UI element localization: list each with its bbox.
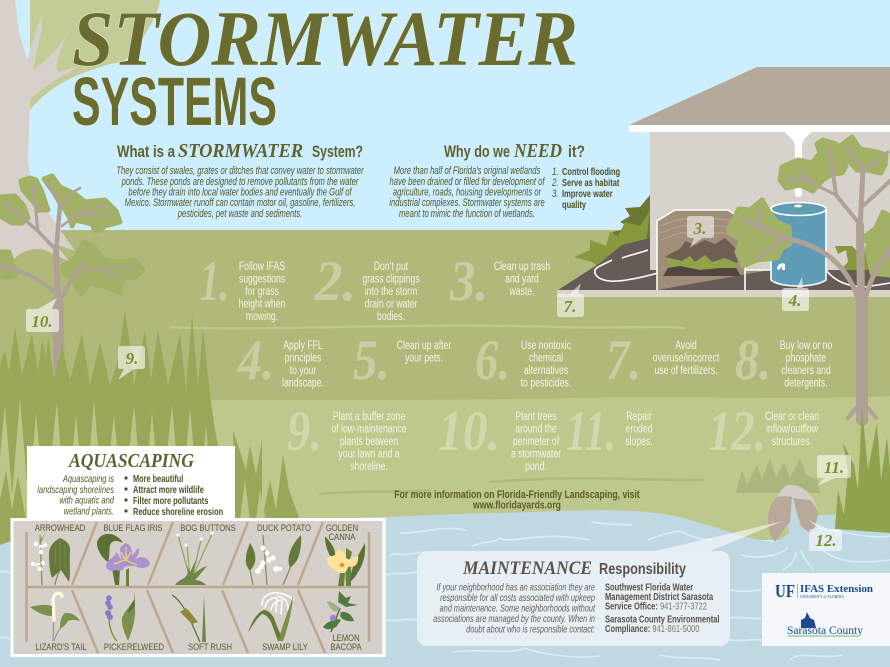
callout 3 — [687, 216, 714, 248]
step 6: chemical — [529, 351, 563, 365]
step 5: your pets. — [405, 351, 443, 365]
plant: soft rush — [172, 595, 232, 652]
lawn upper band — [0, 230, 890, 410]
section: what is a stormwater system — [116, 140, 364, 219]
tree right — [729, 137, 890, 420]
aquascaping panel: wetland plants. — [64, 505, 114, 517]
plant guide panel — [12, 520, 384, 656]
plant: lizard's tail: LIZARD'S TAIL — [35, 641, 87, 652]
step 4: 4. — [237, 329, 274, 392]
step 11: eroded — [626, 422, 653, 436]
step 5 — [353, 329, 452, 392]
step 5: Clean up after — [397, 339, 452, 352]
house — [629, 67, 890, 275]
step 4: principles — [285, 351, 321, 365]
water waves — [0, 522, 890, 660]
callout 4: 4. — [788, 291, 801, 310]
step 8: detergents. — [784, 376, 828, 390]
downspout — [785, 132, 811, 197]
plant: arrowhead: ARROWHEAD — [35, 522, 85, 533]
callout 12 — [808, 520, 842, 551]
step 11: slopes. — [625, 435, 653, 448]
step 6: alternatives — [524, 364, 568, 377]
step 6: 6. — [475, 329, 510, 392]
step 1 — [200, 250, 285, 323]
step 2: grass clippings — [362, 272, 420, 286]
step 10 — [438, 400, 561, 473]
step 11: Repair — [626, 410, 652, 423]
aquascaping panel: landscaping shorelines — [37, 484, 114, 495]
step 1: height when — [239, 297, 285, 311]
step 2 — [314, 250, 420, 323]
callout 10 — [26, 298, 59, 332]
callout 7 — [557, 283, 584, 317]
step 7: use of fertilizers. — [654, 364, 718, 377]
aquascaping panel: with aquatic and — [59, 494, 115, 506]
plant: arrowhead — [31, 522, 85, 585]
rain barrel — [771, 202, 826, 286]
section: why do we need it: More than half of Florida's original wetlands — [394, 165, 541, 176]
step 12: 12. — [708, 400, 766, 463]
callout 11 — [817, 455, 851, 486]
maintenance panel: associations are managed by the county. When in — [433, 613, 595, 624]
maintenance panel: Compliance: 941-861-5000 — [605, 623, 699, 634]
step 3: and yard — [505, 272, 539, 286]
reasons list — [551, 166, 620, 210]
step 7: 7. — [606, 329, 641, 392]
aquascaping panel: Filter more pollutants — [133, 495, 208, 506]
section: what is a stormwater system: System? — [312, 142, 363, 161]
logo: UF IFAS Extension: UNIVERSITY of FLORIDA — [800, 594, 845, 599]
step 12: Clear or clean — [765, 410, 819, 423]
maintenance panel: Service Office: 941-377-3722 — [605, 600, 707, 612]
step 6: to pesticides. — [521, 376, 571, 390]
plant: blue flag iris — [97, 522, 163, 586]
background tree with canopy — [0, 0, 160, 265]
aquascaping panel: More beautiful — [133, 473, 183, 484]
florida-friendly footer note: For more information on Florida-Friendly Landscaping, visit — [394, 489, 640, 501]
reasons list: 2. — [551, 177, 559, 188]
logo: UF IFAS Extension: IFAS Extension — [800, 583, 873, 595]
callout 9: 9. — [126, 349, 138, 368]
maintenance panel: Management District Sarasota — [605, 591, 713, 602]
reasons list: Improve water — [562, 188, 613, 199]
maintenance panel pointer — [655, 521, 783, 551]
logo: UF IFAS Extension: UF — [775, 581, 795, 601]
step 7 — [606, 329, 719, 392]
step 9: shoreline. — [350, 460, 388, 473]
step 9: of low-maintenance — [331, 422, 407, 436]
section: what is a stormwater system: pesticides, pet waste and sediments. — [177, 208, 302, 219]
callout 7: 7. — [564, 297, 576, 316]
step 12 — [708, 400, 819, 463]
section: why do we need it: Why do we — [444, 142, 510, 161]
step 4: landscape. — [282, 376, 324, 390]
step 2: drain or water — [365, 297, 418, 311]
plant: pickerelweed: PICKERELWEED — [104, 641, 164, 652]
plant: golden canna: GOLDEN — [326, 522, 358, 533]
plant: swamp lily — [248, 593, 308, 652]
plant: blue flag iris: BLUE FLAG IRIS — [103, 522, 163, 533]
section: what is a stormwater system: Mexico. Stormwater runoff can contain motor oil, gasoline, fertilizers, — [125, 197, 355, 208]
aquascaping panel: Reduce shoreline erosion — [133, 506, 223, 517]
logos panel — [762, 573, 890, 646]
step 1: for grass — [245, 285, 279, 298]
maintenance panel: If your neighborhood has an association they are — [436, 581, 595, 593]
plant: lemon bacopa: LEMON — [332, 632, 360, 643]
sidewalk — [557, 290, 890, 297]
step 8: cleaners and — [781, 364, 831, 377]
step 6 — [475, 329, 572, 392]
step 3: Clean up trash — [494, 260, 550, 273]
step 7: overuse/incorrect — [653, 351, 719, 365]
logo: Sarasota County: Sarasota County — [787, 623, 863, 637]
plant: lemon bacopa: BACOPA — [330, 641, 362, 652]
plant: golden canna — [325, 522, 365, 586]
aquascaping panel: Attract more wildlife — [133, 484, 204, 495]
step 2: bodies. — [377, 310, 405, 323]
callout 11: 11. — [824, 458, 844, 477]
step 9: 9. — [287, 400, 322, 463]
section: what is a stormwater system: ponds. These ponds are designed to remove pollutants from the water — [121, 176, 359, 187]
title: SYSTEMS — [72, 63, 277, 140]
step 9: Plant a buffer zone — [333, 410, 405, 423]
title — [72, 0, 578, 140]
step 12: inflow/outflow — [766, 422, 818, 436]
step 10: Plant trees — [515, 410, 557, 423]
step 8: phosphate — [786, 351, 826, 365]
step 2: Don't put — [374, 260, 408, 273]
step 3 — [449, 250, 550, 313]
step 8 — [735, 329, 832, 392]
step 8: Buy low or no — [780, 339, 832, 352]
step 1: Follow IFAS — [239, 260, 285, 273]
reasons list: 1. — [552, 166, 559, 177]
callout 10: 10. — [31, 312, 53, 331]
step 4 — [237, 329, 324, 392]
step 3: 3. — [449, 250, 488, 313]
section: why do we need it: meant to mimic the function of wetlands. — [399, 208, 535, 219]
maintenance panel: Responsibility — [599, 561, 686, 578]
mulch bed — [558, 238, 890, 290]
tall grass left — [0, 310, 300, 545]
callout 3: 3. — [693, 219, 706, 238]
florida-friendly footer note: www.floridayards.org — [472, 500, 561, 512]
step 12: structures. — [772, 435, 812, 448]
section: why do we need it: industrial complexes. Stormwater systems are — [389, 197, 545, 208]
step 9 — [287, 400, 407, 473]
plant: soft rush: SOFT RUSH — [188, 641, 232, 652]
plant: bog buttons: BOG BUTTONS — [180, 522, 236, 533]
plant: lizard's tail — [30, 593, 87, 652]
florida-friendly footer note — [394, 489, 640, 512]
maintenance panel: MAINTENANCE — [462, 558, 592, 579]
step 7: Avoid — [675, 339, 697, 352]
section: why do we need it: have been drained or filled for development of — [389, 176, 546, 187]
callout 4 — [782, 277, 809, 311]
callout 12: 12. — [815, 531, 837, 550]
water — [0, 502, 890, 667]
lawn lower band — [0, 396, 890, 540]
section: what is a stormwater system: STORMWATER — [178, 140, 303, 162]
faint grass by pipe — [736, 458, 820, 493]
plant: bog buttons — [175, 522, 236, 585]
step 10: perimeter of — [513, 435, 559, 448]
garden hose — [595, 250, 890, 287]
section: why do we need it: NEED — [513, 140, 562, 162]
step 10: a stormwater — [511, 447, 561, 461]
callout 9 — [118, 346, 145, 380]
step 9: your lawn and a — [338, 447, 400, 461]
section: what is a stormwater system: before they drain into local water bodies and eventually the Gulf of — [128, 186, 353, 198]
step 1: mowing. — [246, 310, 278, 323]
step 4: to your — [290, 364, 317, 377]
reasons list: Serve as habitat — [562, 177, 619, 188]
aquascaping panel: AQUASCAPING — [67, 450, 194, 472]
aquascaping panel — [27, 446, 235, 521]
shrubs beside house — [574, 195, 885, 275]
maintenance panel: Southwest Florida Water — [605, 581, 694, 593]
step 5: 5. — [353, 329, 390, 392]
maintenance panel — [417, 551, 730, 646]
step 9: plants between — [340, 435, 398, 448]
reasons list: 3. — [552, 188, 559, 199]
lawn contour strokes — [170, 326, 702, 494]
step 3: waste. — [509, 285, 535, 298]
step 1: suggestions — [239, 272, 285, 286]
maintenance panel: responsible for all costs associated with upkeep — [440, 592, 595, 603]
section: why do we need it: agriculture, roads, housing developments or — [393, 186, 542, 198]
outflow pipe — [768, 485, 818, 542]
section: what is a stormwater system: What is a — [117, 142, 175, 161]
tree 10 — [0, 176, 143, 426]
step 10: around the — [515, 422, 557, 436]
step 10: pond. — [525, 460, 547, 473]
maintenance panel: Sarasota County Environmental — [605, 613, 720, 625]
step 2: 2. — [314, 250, 356, 313]
aquascaping panel: Aquascaping is — [62, 473, 114, 484]
plant: swamp lily: SWAMP LILY — [262, 641, 308, 652]
plant: pickerelweed — [104, 591, 164, 652]
logo: UF IFAS Extension — [775, 581, 873, 601]
section: why do we need it: it? — [568, 142, 585, 161]
compost bin — [657, 210, 770, 290]
step 10: 10. — [438, 400, 500, 463]
step 6: Use nontoxic — [521, 339, 572, 352]
maintenance panel: and maintenance. Some neighborhoods without — [440, 602, 595, 614]
step 4: Apply FFL — [283, 339, 323, 352]
plant: lemon bacopa — [323, 591, 362, 652]
step 2: into the storm — [365, 285, 417, 298]
reasons list: quality — [562, 199, 586, 210]
section: why do we need it — [389, 140, 620, 219]
maintenance panel: doubt about who is responsible contact: — [466, 623, 595, 635]
step 11: 11. — [566, 400, 616, 463]
step 8: 8. — [735, 329, 771, 392]
plant: duck potato — [246, 522, 311, 585]
tall grass right — [835, 408, 890, 533]
plant: golden canna: CANNA — [329, 531, 356, 542]
reasons list: Control flooding — [562, 166, 620, 177]
section: what is a stormwater system: They consist of swales, grates or ditches that convey water to stormwater — [116, 165, 364, 176]
plant: duck potato: DUCK POTATO — [257, 522, 311, 533]
step 1: 1. — [200, 250, 229, 313]
